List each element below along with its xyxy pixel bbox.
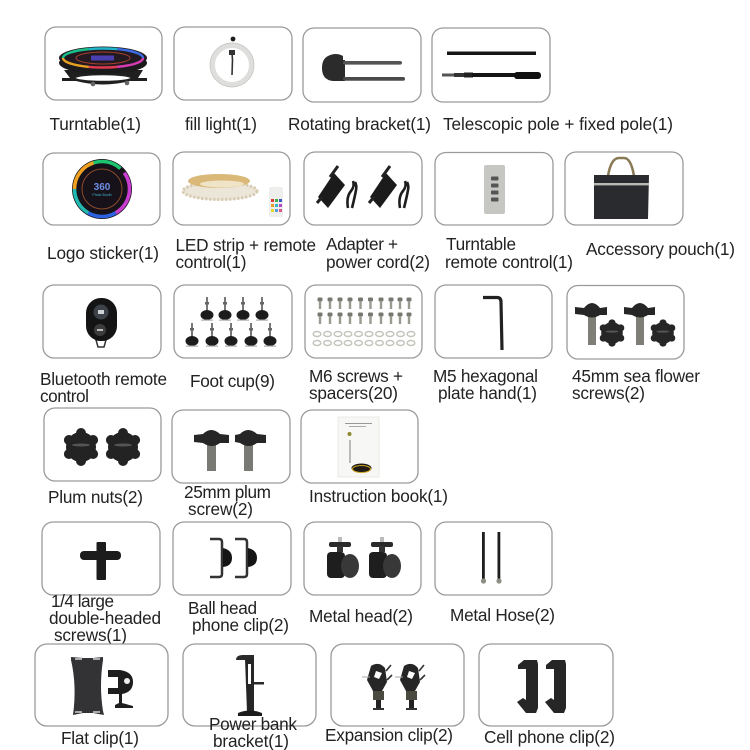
panel: 25mm plum screw — [172, 410, 290, 519]
label: control — [40, 386, 89, 406]
panel: 1/4 large double-headed screws — [42, 522, 161, 645]
panel: Telescopic pole + fixed pole — [432, 28, 673, 134]
label: 1/4 large — [51, 591, 114, 611]
label — [40, 369, 167, 406]
label: spacers(20) — [309, 383, 398, 403]
label: phone clip(2) — [192, 615, 289, 635]
icon: bluetooth remote — [86, 298, 117, 347]
icon: screws and spacers — [313, 298, 415, 346]
label — [572, 366, 700, 403]
icon: metal ball heads — [327, 537, 401, 578]
label: double-headed — [49, 608, 161, 628]
label: 45mm sea flower — [572, 366, 700, 386]
panel: Adapter + power cord — [304, 152, 430, 272]
label: remote control(1) — [445, 252, 573, 272]
label: Bluetooth remote — [40, 369, 167, 389]
icon: foot cups — [186, 297, 276, 347]
icon: logo sticker — [72, 159, 132, 219]
label: Metal Hose(2) — [450, 605, 555, 625]
icon: metal hoses — [481, 532, 502, 584]
label: Turntable(1) — [50, 114, 141, 134]
icon: poles — [442, 52, 541, 79]
label: power cord(2) — [326, 252, 430, 272]
panel: Plum nuts — [44, 408, 161, 507]
label: screws(1) — [54, 625, 127, 645]
label — [433, 366, 538, 403]
icon: ball head phone clips — [210, 539, 257, 577]
label — [188, 598, 289, 635]
panel: Rotating bracket — [288, 28, 431, 134]
label: plate hand(1) — [438, 383, 537, 403]
icon: rotating bracket — [322, 54, 405, 81]
label: Instruction book(1) — [309, 486, 448, 506]
panel: Turntable remote control — [435, 152, 573, 272]
icon: turntable — [59, 46, 147, 86]
label: fill light(1) — [185, 114, 257, 134]
label: Flat clip(1) — [61, 728, 139, 748]
label: 25mm plum — [184, 482, 271, 502]
label: Plum nuts(2) — [48, 487, 143, 507]
panel: 45mm sea flower screws — [567, 286, 700, 403]
label: Turntable — [446, 234, 516, 254]
panel: Metal head — [304, 522, 421, 626]
icon: sea flower screws and nuts — [575, 303, 675, 347]
icon: plum nuts — [64, 428, 140, 466]
panel: Expansion clip — [325, 644, 464, 745]
label: Foot cup(9) — [190, 371, 275, 391]
panel: fill light — [174, 27, 292, 134]
label: screws(2) — [572, 383, 645, 403]
panel: Metal Hose — [435, 522, 555, 625]
label: screw(2) — [188, 499, 253, 519]
icon: power adapters — [317, 166, 408, 208]
icon: LED strip and remote — [182, 174, 283, 217]
panel: Accessory pouch — [565, 152, 735, 259]
icon: logo sticker: Photo Booth — [92, 193, 112, 197]
panel: Foot cup — [174, 285, 292, 391]
panel: M5 hexagonal plate hand — [433, 285, 552, 403]
label: Rotating bracket(1) — [288, 114, 431, 134]
panel: M6 screws + spacers — [305, 285, 422, 403]
label — [49, 591, 161, 645]
icon: logo sticker: 360 — [94, 182, 111, 193]
icon: hex key — [483, 298, 502, 350]
panel: Instruction book — [301, 410, 448, 506]
icon: expansion clips — [362, 664, 425, 710]
icon: double-headed screw — [80, 542, 121, 580]
label — [184, 482, 271, 519]
icon: instruction booklet — [338, 417, 379, 477]
panel: Logo sticker — [43, 153, 160, 263]
label — [326, 234, 430, 272]
label — [209, 714, 297, 750]
label: Cell phone clip(2) — [484, 727, 615, 747]
label — [309, 366, 403, 403]
panel: LED strip + remote control — [173, 152, 316, 272]
label: Expansion clip(2) — [325, 725, 453, 745]
label: Ball head — [188, 598, 257, 618]
label: Accessory pouch(1) — [586, 239, 735, 259]
panel: Flat clip — [35, 644, 168, 748]
icon: power bank bracket — [236, 655, 264, 716]
panel: Turntable — [45, 27, 162, 134]
panel: Ball head phone clip — [173, 522, 291, 635]
label: M5 hexagonal — [433, 366, 538, 386]
label: Logo sticker(1) — [47, 243, 159, 263]
panel: Cell phone clip — [479, 644, 615, 747]
label: Adapter + — [326, 234, 398, 254]
panel: Bluetooth remote control — [40, 285, 167, 406]
label — [176, 235, 316, 272]
icon: cell phone clips — [517, 660, 566, 713]
panel: Power bank bracket — [183, 644, 316, 750]
icon: turntable remote — [484, 165, 505, 214]
label: M6 screws + — [309, 366, 403, 386]
label: Power bank — [209, 714, 297, 734]
icon: ring fill light — [210, 37, 254, 87]
label: control(1) — [176, 252, 246, 272]
label: Telescopic pole + fixed pole(1) — [443, 114, 673, 134]
icon: plum screws — [194, 430, 266, 471]
label: Metal head(2) — [309, 606, 413, 626]
label — [445, 234, 573, 272]
label: LED strip + remote — [176, 235, 316, 255]
icon: bag — [594, 158, 649, 219]
icon: tablet clip and mount — [71, 657, 133, 715]
